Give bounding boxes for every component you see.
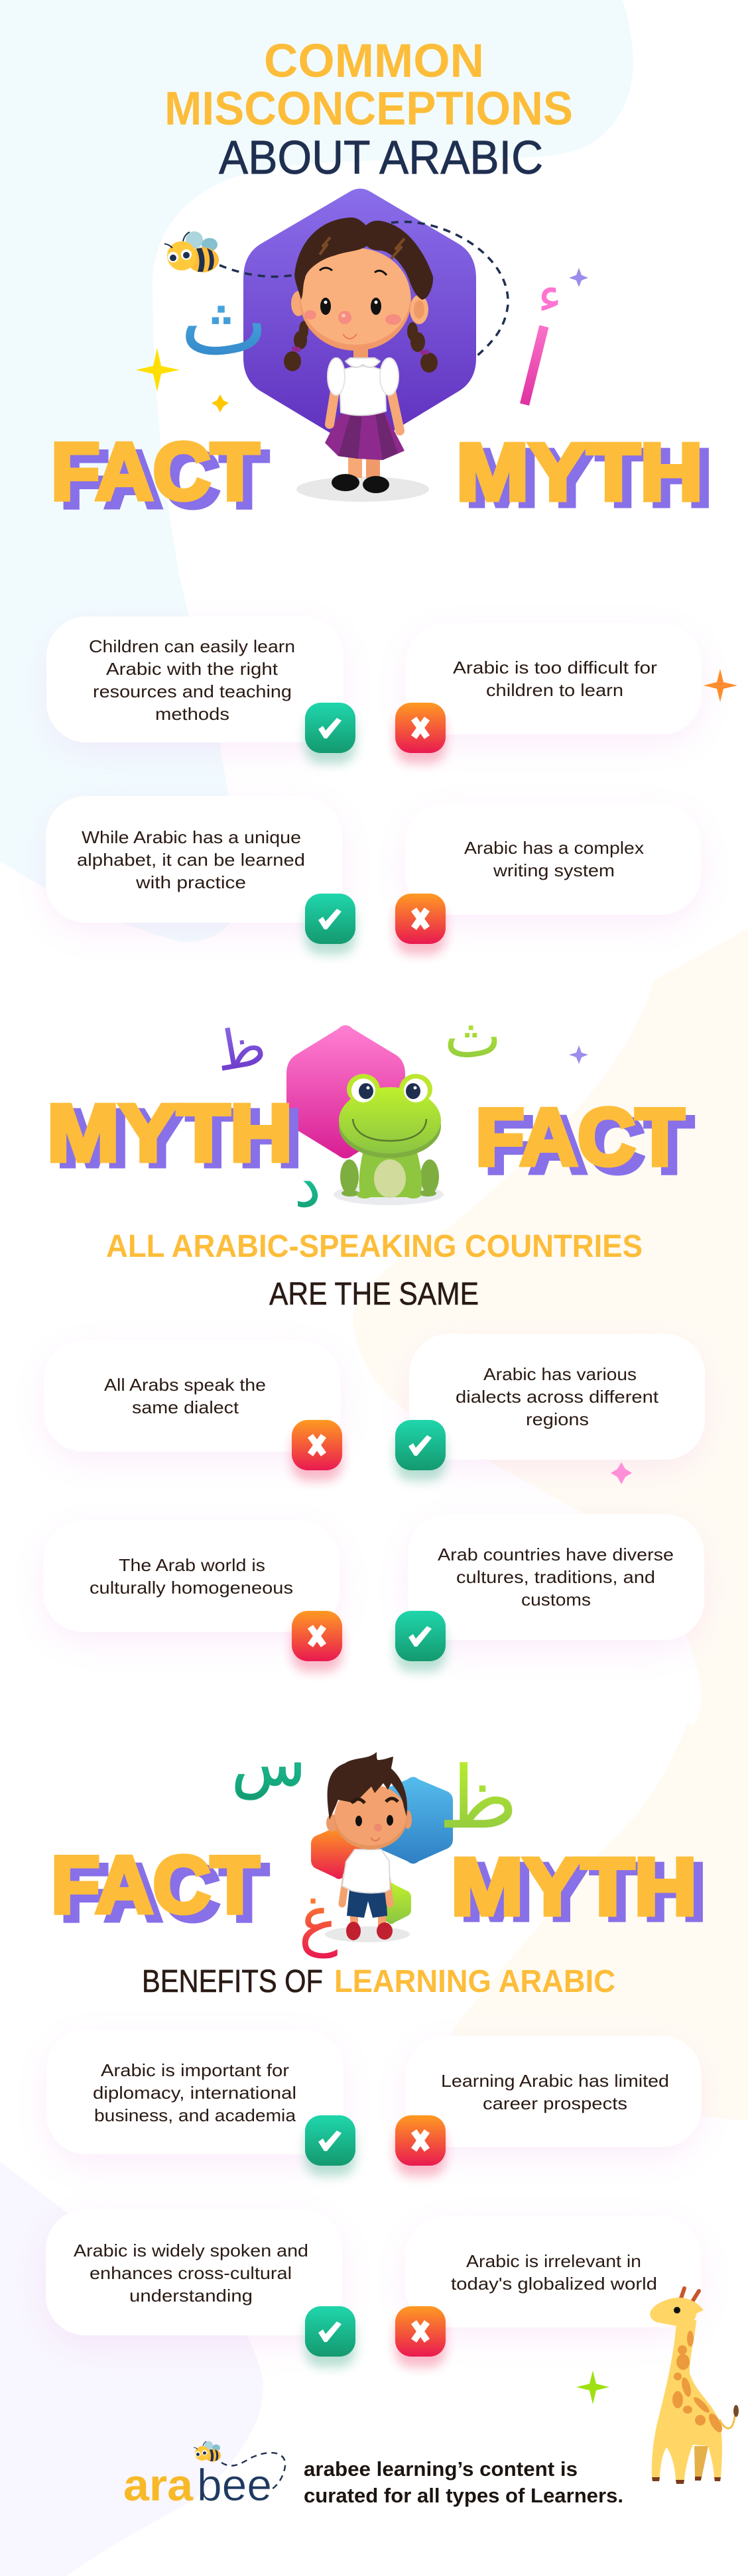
card text: Arabic is important for [101,2060,289,2080]
icon: cross badge [292,1611,342,1672]
card text [93,2060,296,2125]
card text: enhances cross-cultural [90,2263,292,2283]
heading: MYTH (hero): MYTH [456,427,703,517]
background: lavender blob [0,2162,263,2576]
card text: regions [526,1409,589,1429]
panel: fact card 6 [46,2209,342,2342]
tagline [304,2457,623,2507]
title: COMMON [264,35,484,88]
card text [74,2241,308,2306]
panel: fact card 1 [46,616,343,749]
heading: all arabic-speaking countries: ALL ARABIC-SPEAKING COUNTRIES [106,1229,643,1264]
heading: FACT (hero): FACT [60,434,269,524]
star: orange [704,669,737,702]
arabic letter: teal dal: د [294,1150,321,1221]
title: ABOUT ARABIC [219,132,543,184]
card text: business, and academia [94,2105,296,2125]
card text [77,827,305,892]
card text: culturally homogeneous [90,1578,293,1598]
card text [104,1375,266,1417]
icon: cross badge [395,703,446,764]
icon: cross badge [292,1420,342,1481]
card text: children to learn [486,680,623,700]
character: boy [325,1752,412,1942]
arabic letter: red ghain: غ [298,1881,338,1958]
logo dashed path [221,2453,285,2489]
arabic letter: blue tha: ث [180,267,269,377]
arabic letter: green seen: س [231,1730,306,1800]
star: small yellow [212,394,229,412]
arabic letter: pink alef with hamza: ء [537,264,562,325]
purple hexagon [243,188,476,447]
panel: myth card 4 [43,1521,340,1639]
card text: same dialect [132,1397,239,1417]
heading: FACT (section 2): FACT [485,1100,694,1190]
title [164,35,573,184]
heading: MYTH (hero): MYTH [466,433,712,523]
card text: understanding [129,2286,253,2306]
arabic letter: lime zah: ظ [438,1747,518,1848]
card text: Arabic has a complex [464,838,644,858]
heading: MYTH (section 2): MYTH [56,1093,302,1183]
card text: Arab countries have diverse [438,1545,674,1564]
title: MISCONCEPTIONS [164,83,573,135]
card text: All Arabs speak the [104,1375,266,1395]
card text [453,658,657,700]
card text: diplomacy, international [93,2083,296,2103]
card text [451,2251,657,2294]
card text [464,838,644,880]
logo bee [194,2441,221,2462]
card text: today's globalized world [451,2274,657,2294]
star: large yellow [136,348,180,392]
logo: arabee [123,2441,285,2510]
heading: are the same: ARE THE SAME [269,1277,479,1312]
heading: benefits of learning arabic [142,1964,615,1999]
tagline: arabee learning’s content is [304,2457,578,2481]
card text: resources and teaching [93,681,292,701]
card text: career prospects [483,2093,627,2113]
arabic letter: lime tha: ث [444,1000,501,1071]
card text [441,2071,669,2113]
icon: check badge [305,703,355,764]
character: frog [334,1074,444,1205]
panel: myth card 2 [405,803,701,921]
card text: customs [521,1590,591,1610]
card text: Arabic is too difficult for [453,658,657,677]
heading: FACT (section 3): FACT [60,1847,269,1938]
star: purple [569,1045,588,1064]
dashed flight path [219,222,508,356]
heading: MYTH (section 3): MYTH [460,1847,706,1937]
card text: The Arab world is [119,1555,265,1575]
card text: Arabic is widely spoken and [74,2241,308,2260]
star: purple [569,268,588,287]
pink hexagon [286,1025,405,1159]
card text: Arabic has various [483,1364,637,1384]
card text: While Arabic has a unique [82,827,301,847]
panel: fact card 2 [46,796,342,929]
card text [90,1555,293,1598]
card text [456,1364,659,1429]
arabic letter: pink alef with hamza: ا [504,305,563,432]
green hexagon [371,1883,411,1924]
icon: check badge [305,894,355,955]
heading: FACT (hero): FACT [51,426,259,516]
card text: alphabet, it can be learned [77,850,305,870]
icon: cross badge [395,2306,446,2367]
heading: FACT (section 3): FACT [51,1840,259,1930]
logo wordmark: ara [123,2460,194,2510]
icon: check badge [305,2115,355,2176]
card text: dialects across different [456,1387,659,1407]
panel: myth card 5 [406,2036,702,2154]
icon: check badge [395,1420,446,1481]
card text: with practice [135,872,246,892]
star: green [576,2371,609,2404]
panel: fact card 5 [46,2029,343,2162]
card text: Children can easily learn [89,636,295,656]
orange hexagon [311,1826,367,1879]
heading: MYTH (section 2): MYTH [47,1088,292,1178]
icon: bee [164,231,219,272]
card text: Arabic is irrelevant in [466,2251,641,2271]
heading: MYTH (section 3): MYTH [451,1842,697,1932]
heading: benefits of learning arabic: LEARNING ARABIC [334,1964,615,1999]
character: giraffe [650,2288,739,2484]
heading: FACT (section 2): FACT [475,1092,684,1182]
card text: writing system [493,860,615,880]
tagline: curated for all types of Learners. [304,2484,623,2507]
character: girl [284,217,438,502]
panel: myth card 1 [406,623,702,741]
icon: cross badge [395,2115,446,2176]
star: pink [611,1462,632,1484]
icon: cross badge [395,894,446,955]
card text [89,636,295,724]
arabic letter: purple zah: ظ [210,1014,271,1084]
panel: myth card 3 [44,1340,341,1458]
icon: check badge [305,2306,355,2367]
background: cream blob [353,928,748,2121]
panel: fact card 4 [408,1514,704,1647]
card text: methods [155,704,229,724]
heading: benefits of learning arabic: BENEFITS OF [142,1964,323,1999]
blue hexagon [373,1777,453,1864]
panel: myth card 6 [405,2216,701,2334]
card text [438,1545,674,1610]
icon: check badge [395,1611,446,1672]
card text: cultures, traditions, and [456,1567,655,1587]
card text: Learning Arabic has limited [441,2071,669,2091]
background: pale blue blob [0,0,633,942]
card text: Arabic with the right [106,659,279,679]
panel: fact card 3 [409,1334,705,1466]
logo: arabee: bee [197,2460,272,2510]
